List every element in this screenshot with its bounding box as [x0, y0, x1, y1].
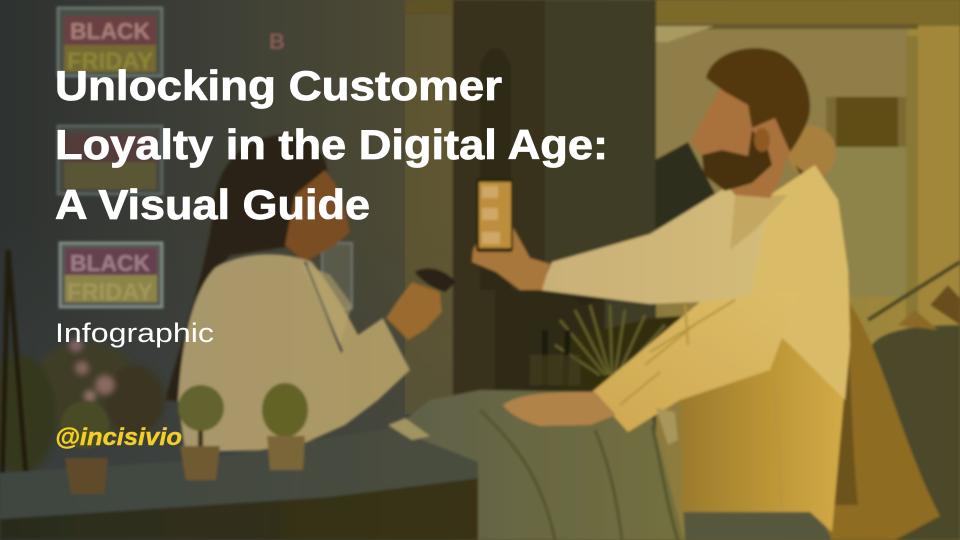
sign: top black friday: [58, 8, 162, 76]
man: [472, 48, 850, 540]
title: [55, 62, 608, 228]
woman: [165, 135, 456, 452]
sign: middle black friday: [58, 126, 162, 194]
sign: top black friday: BLACK: [70, 18, 150, 44]
lowered arm: [592, 290, 800, 432]
sign: small letter b: B: [269, 29, 285, 54]
sign: lower black friday: BLACK: [70, 250, 150, 276]
jeans: [683, 505, 832, 540]
subtitle: Infographic: [55, 318, 214, 348]
store signs on the wall: [58, 8, 352, 309]
topiary pots: [65, 383, 308, 494]
title line 2: Loyalty in the Digital Age:: [55, 121, 608, 168]
folded garment on counter: [388, 390, 684, 540]
plants left: [0, 250, 165, 505]
face: [285, 170, 350, 262]
raised sleeve: [540, 188, 770, 304]
raised hand: [472, 222, 550, 290]
collar: [730, 195, 788, 250]
hair braid: [165, 135, 328, 402]
beard: [702, 130, 772, 191]
sign: top black friday: FRIDAY: [67, 48, 153, 75]
pot one: [178, 385, 224, 480]
background person and dark jacket: [655, 126, 836, 270]
sign: sign behind woman: [322, 243, 352, 309]
phone: [476, 178, 513, 252]
handle: @incisivio: [55, 424, 182, 451]
mid plant and devices: [495, 277, 682, 395]
counter: [0, 425, 480, 540]
pot three: [65, 458, 108, 494]
hand on cloth: [503, 392, 616, 426]
title line 3: A Visual Guide: [55, 181, 370, 228]
clothes rack: [825, 262, 960, 540]
hair: [706, 48, 810, 152]
sign: lower black friday: FRIDAY: [67, 279, 153, 306]
neck and face: [690, 80, 790, 198]
ear: [754, 128, 770, 152]
pot two: [262, 383, 308, 470]
shirt body: [680, 165, 850, 532]
blazer: [178, 254, 410, 452]
shirt tail: [656, 408, 678, 445]
pillar: [405, 0, 656, 540]
title line 1: Unlocking Customer: [55, 62, 502, 109]
right room: [656, 0, 960, 540]
sign: lower black friday: [60, 243, 162, 307]
hand with scanner: [386, 282, 442, 340]
